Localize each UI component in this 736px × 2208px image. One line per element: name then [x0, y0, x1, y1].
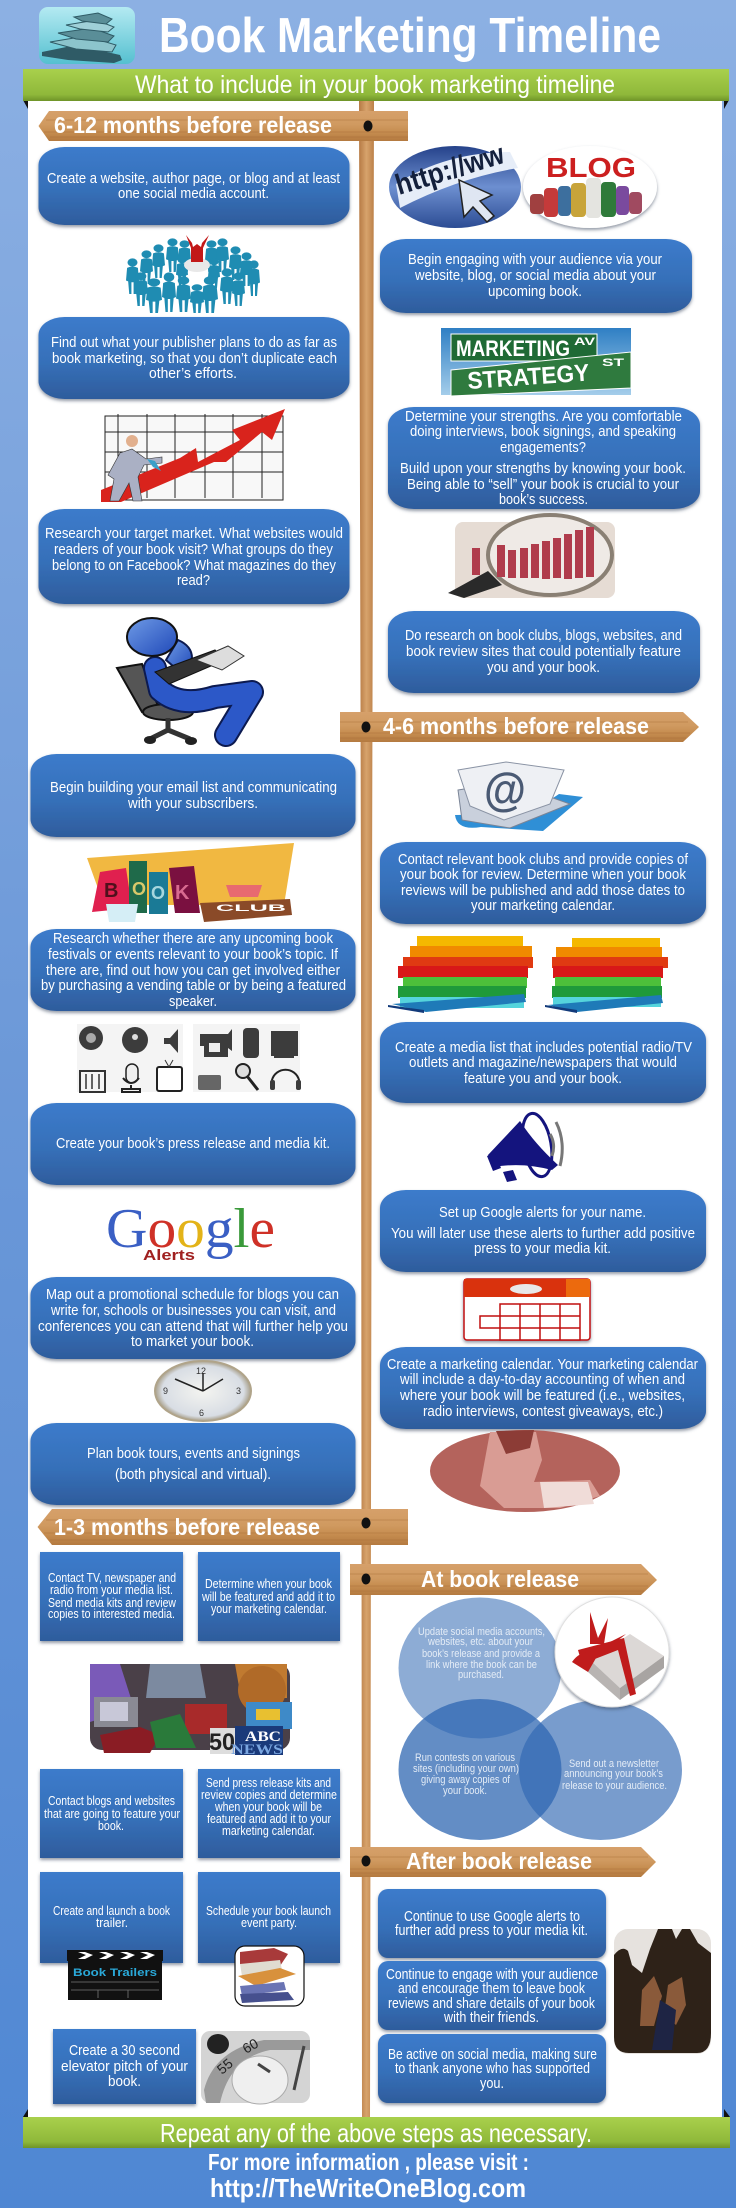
- image: email envelope with arrow: @: [484, 763, 526, 815]
- venn circle: run contests: [398, 1699, 562, 1840]
- square box: send press release kits: featured and add it to your: [207, 1811, 332, 1826]
- text box: research your target market: readers of your book visit? What groups do they: [54, 542, 334, 558]
- image: media collage: ABC: [245, 1729, 281, 1745]
- venn text: send newsletter: release to your audience.: [562, 1780, 667, 1792]
- text box: marketing calendar: radio interviews, contest giveaways, etc.): [423, 1404, 663, 1420]
- square box: elevator pitch: elevator pitch of your: [61, 2059, 188, 2075]
- text box: continue google alerts: Continue to use Google alerts to: [404, 1909, 580, 1925]
- image: crowd around a leader: [126, 235, 260, 313]
- text box: contact book clubs: reviews will be published and add those dates to: [401, 883, 685, 899]
- text box: research your target market: Research your target market. What websites would: [45, 526, 343, 542]
- text box: create a media list: [380, 1022, 706, 1103]
- square box: send press release kits: marketing calendar.: [222, 1823, 315, 1838]
- sign: 4-6 months before release: 4-6 months before release: [383, 713, 649, 739]
- image: media collage: NEWS: [231, 1742, 283, 1758]
- text box: festivals and events: speaker.: [169, 994, 217, 1010]
- text box: email list: Begin building your email list and communicating: [50, 780, 337, 796]
- text box: create a website: one social media account.: [118, 186, 269, 202]
- text box: promotional schedule: conferences you can attend that will further help you: [38, 1319, 348, 1335]
- image: red calendar: [464, 1279, 590, 1340]
- text box: google alerts: Set up Google alerts for your name.: [439, 1205, 646, 1221]
- text box: create a website: Create a website, author page, or blog and at least: [47, 171, 340, 187]
- image: stopwatch: 55: [214, 2055, 236, 2077]
- venn text: send newsletter: announcing your book’s: [564, 1768, 663, 1780]
- image: media collage: 50: [209, 1729, 235, 1756]
- image: blog with coloured people: BLOG: [546, 152, 636, 183]
- venn text: update social media: link where the book can be: [426, 1659, 537, 1671]
- text box: begin engaging: [380, 239, 692, 313]
- venn text: run contests: giving away copies of: [421, 1774, 511, 1786]
- text box: be active on social media: to thank anyone who has supported: [395, 2061, 590, 2077]
- text box: google alerts: You will later use these alerts to further add positive: [391, 1226, 695, 1242]
- text box: determine your strengths: book’s success.: [499, 492, 588, 508]
- text box: create a media list: outlets and magazine/newspapers that would: [409, 1055, 677, 1071]
- square box: launch party: [198, 1872, 340, 1963]
- image: gift-wrapped book: [555, 1597, 669, 1707]
- square box: contact tv: radio from your media list.: [50, 1582, 173, 1597]
- image: books in rounded frame: [235, 1946, 304, 2006]
- text box: be active on social media: you.: [480, 2076, 504, 2092]
- text box: research book clubs: book review sites that could potentially feature: [406, 644, 681, 660]
- text box: continue to engage: reviews and share details of your book: [388, 1996, 596, 2012]
- image: stopwatch: 60: [240, 2035, 261, 2057]
- text box: plan book tours: [30, 1423, 356, 1505]
- square box: launch party: Schedule your book launch: [206, 1903, 331, 1918]
- text box: determine your strengths: Determine your strengths. Are you comfortable: [405, 409, 682, 425]
- image: wall clock: 6: [199, 1408, 204, 1418]
- text box: publisher plans: book marketing, so that you don’t duplicate each: [52, 351, 337, 367]
- title: Book Marketing Timeline: [159, 9, 661, 63]
- venn circle: send newsletter: [519, 1700, 682, 1840]
- square box: elevator pitch: Create a 30 second: [69, 2043, 180, 2059]
- text box: continue google alerts: further add press to your media kit.: [395, 1923, 588, 1939]
- text box: email list: with your subscribers.: [127, 796, 258, 812]
- text box: festivals and events: [30, 929, 356, 1011]
- text box: research book clubs: you and your book.: [487, 660, 600, 676]
- image: wall clock: 12: [196, 1366, 206, 1376]
- image: marketing strategy street signs: MARKETING: [456, 336, 570, 361]
- text box: marketing calendar: will include a day-to-day accounting of when and: [399, 1372, 685, 1388]
- sign: 6-12 months before release: 6-12 months before release: [54, 112, 332, 138]
- image: retro book club illustration: O: [132, 879, 146, 899]
- image: http browser address globe: http://ww: [392, 138, 509, 202]
- venn text: update social media: book’s release and provide a: [422, 1648, 541, 1660]
- text box: contact book clubs: [380, 842, 706, 924]
- text box: research book clubs: [388, 611, 700, 693]
- text box: publisher plans: other’s efforts.: [149, 366, 237, 382]
- text box: research book clubs: Do research on book clubs, blogs, websites, and: [405, 628, 682, 644]
- text box: press release: Create your book’s press release and media kit.: [56, 1136, 330, 1152]
- venn text: run contests: your book.: [443, 1785, 487, 1797]
- square box: contact blogs: Contact blogs and websites: [48, 1793, 175, 1808]
- timeline post: [359, 100, 374, 2118]
- venn text: send newsletter: Send out a newsletter: [569, 1758, 659, 1770]
- image: media icon grid: [77, 1024, 301, 1092]
- image: retro book club illustration: [87, 843, 294, 922]
- image: businessman on red growth arrow: [101, 409, 285, 502]
- venn circle: update social media: [398, 1598, 562, 1738]
- image: google alerts logo: Alerts: [143, 1247, 195, 1264]
- square box: contact blogs: that are going to feature your: [44, 1806, 181, 1821]
- square box: book trailer: Create and launch a book: [53, 1903, 170, 1918]
- square box: contact blogs: [40, 1769, 183, 1858]
- square box: contact tv: copies to interested media.: [48, 1606, 175, 1621]
- venn text: run contests: [413, 1752, 519, 1797]
- text box: create a website: [38, 147, 350, 225]
- text box: determine your strengths: doing interviews, book signings, and speaking: [410, 424, 676, 440]
- image: wall clock: 3: [236, 1386, 241, 1396]
- text box: festivals and events: by purchasing a vending table or by being a featured: [41, 978, 346, 994]
- venn text: update social media: Update social media accounts,: [418, 1626, 545, 1638]
- square box: send press release kits: [198, 1769, 340, 1858]
- square box: book trailer: [40, 1872, 183, 1963]
- square box: launch party: event party.: [241, 1915, 297, 1930]
- square box: determine when featured: your marketing calendar.: [211, 1601, 327, 1616]
- image: marketing strategy street signs: AV: [574, 336, 596, 348]
- venn text: update social media: [418, 1626, 545, 1681]
- image: blog with coloured people: [523, 146, 657, 228]
- square box: determine when featured: will be featured and add it to: [201, 1589, 335, 1604]
- text box: contact book clubs: Contact relevant book clubs and provide copies of: [398, 852, 689, 868]
- venn text: run contests: sites (including your own): [413, 1763, 519, 1775]
- header logo: stack of books: [39, 7, 135, 64]
- text box: marketing calendar: Create a marketing calendar. Your marketing calendar: [387, 1357, 698, 1373]
- text box: festivals and events: there are, find out how you can get involved either: [46, 963, 340, 979]
- venn text: send newsletter: [562, 1758, 667, 1792]
- square box: contact tv: Contact TV, newspaper and: [48, 1570, 176, 1585]
- footer call to action: For more information , please visit :: [208, 2149, 529, 2175]
- square box: determine when featured: Determine when your book: [205, 1576, 332, 1591]
- sign: 1-3 months before release: [38, 1509, 408, 1545]
- sign: at book release: [350, 1564, 657, 1595]
- text box: festivals and events: Research whether there are any upcoming book: [53, 931, 334, 947]
- image: book trailers clapperboard: [67, 1950, 163, 2000]
- square box: contact tv: [40, 1552, 183, 1641]
- sign: after book release: After book release: [406, 1848, 592, 1874]
- text box: research your target market: belong to on Facebook? What magazines do they: [52, 558, 337, 574]
- sign: 6-12 months before release: [38, 111, 408, 141]
- text box: email list: [30, 754, 356, 837]
- text box: google alerts: press to your media kit.: [474, 1241, 611, 1257]
- text box: create a media list: feature you and your book.: [464, 1071, 622, 1087]
- image: http browser address globe: [389, 138, 521, 228]
- text box: continue to engage: with their friends.: [443, 2010, 539, 2026]
- image: retro book club illustration: CLUB: [216, 903, 287, 913]
- text box: continue to engage: Continue to engage with your audience: [386, 1967, 598, 1983]
- sign: at book release: At book release: [421, 1566, 579, 1592]
- text box: continue to engage: and encourage them to leave book: [398, 1981, 586, 1997]
- image: media collage: [90, 1664, 292, 1758]
- venn text: run contests: Run contests on various: [415, 1752, 515, 1764]
- text box: contact book clubs: your book for review. Determine when your book: [400, 867, 687, 883]
- text box: promotional schedule: to market your book.: [131, 1334, 254, 1350]
- image: blue figure reading in a chair: [117, 618, 252, 745]
- image: colourful book stacks: [388, 936, 668, 1013]
- image: wall clock: 9: [163, 1386, 168, 1396]
- text box: promotional schedule: write for, schools or businesses you can visit, and: [50, 1303, 336, 1319]
- square box: send press release kits: when your book will be: [214, 1799, 322, 1814]
- image: retro book club illustration: B: [104, 880, 118, 902]
- image: email envelope with arrow: [455, 762, 583, 831]
- sign: 4-6 months before release: [340, 712, 699, 742]
- square box: send press release kits: review copies and determine: [201, 1787, 337, 1802]
- image: google alerts logo: Google: [106, 1198, 275, 1260]
- top green banner: [23, 69, 729, 109]
- square box: send press release kits: Send press release kits and: [206, 1775, 331, 1790]
- text box: marketing calendar: [380, 1347, 706, 1429]
- image: graduates photo: [614, 1929, 711, 2054]
- image: retro book club illustration: O: [151, 883, 165, 903]
- sign: after book release: [350, 1847, 656, 1877]
- text box: determine your strengths: Build upon your strengths by knowing your book.: [400, 461, 686, 477]
- text box: plan book tours: Plan book tours, events and signings: [87, 1446, 300, 1462]
- image: woman signing books: [430, 1430, 620, 1512]
- text box: continue to engage: [378, 1961, 606, 2030]
- text box: begin engaging: Begin engaging with your audience via your: [408, 252, 662, 268]
- square box: elevator pitch: [53, 2029, 196, 2104]
- image: book trailers clapperboard: Book Trailers: [73, 1967, 157, 1979]
- square box: contact tv: Send media kits and review: [48, 1595, 177, 1610]
- venn text: update social media: purchased.: [458, 1669, 504, 1681]
- square box: contact blogs: book.: [98, 1818, 124, 1833]
- text box: determine your strengths: Being able to “sell” your book is crucial to your: [407, 477, 679, 493]
- text box: plan book tours: (both physical and virtual).: [115, 1467, 271, 1483]
- text box: be active on social media: [378, 2034, 606, 2103]
- text box: be active on social media: Be active on social media, making sure: [388, 2047, 597, 2063]
- image: marketing strategy street signs: ST: [602, 357, 624, 369]
- text box: festivals and events: festivals or events relevant to your book’s topic. If: [48, 947, 339, 963]
- text box: determine your strengths: engagements?: [500, 440, 586, 456]
- image: retro book club illustration: K: [175, 882, 190, 904]
- sign: 1-3 months before release: 1-3 months before release: [54, 1514, 320, 1540]
- square box: book trailer: trailer.: [96, 1915, 128, 1930]
- bottom green banner: Repeat any of the above steps as necessary.: [160, 2118, 592, 2148]
- text box: marketing calendar: where your book will be featured (i.e., websites,: [399, 1388, 685, 1404]
- text box: promotional schedule: [30, 1277, 356, 1359]
- text box: google alerts: [380, 1190, 706, 1272]
- top green banner: What to include in your book marketing timeline: [135, 71, 615, 99]
- square box: elevator pitch: book.: [108, 2074, 141, 2090]
- text box: research your target market: [38, 509, 350, 604]
- text box: publisher plans: Find out what your publisher plans to do as far as: [51, 335, 337, 351]
- image: marketing strategy street signs: STRATEGY: [467, 360, 590, 395]
- image: wall clock: [155, 1361, 251, 1421]
- text box: begin engaging: website, blog, or social media about your: [414, 268, 656, 284]
- text box: continue google alerts: [378, 1889, 606, 1958]
- text box: contact book clubs: your marketing calendar.: [471, 898, 615, 914]
- image: megaphone: [487, 1111, 562, 1182]
- text box: research your target market: read?: [177, 573, 210, 589]
- square box: determine when featured: [198, 1552, 340, 1641]
- text box: press release: [30, 1103, 356, 1185]
- bottom green banner: [23, 2109, 730, 2148]
- venn diagram of release activities: [398, 1598, 682, 1840]
- image: marketing strategy street signs: [441, 328, 631, 396]
- image: stopwatch: [201, 2031, 310, 2104]
- venn text: update social media: websites, etc. about your: [427, 1636, 533, 1648]
- text box: begin engaging: upcoming book.: [488, 284, 582, 300]
- text box: promotional schedule: Map out a promotional schedule for blogs you can: [46, 1287, 339, 1303]
- footer url: http://TheWriteOneBlog.com: [210, 2173, 526, 2203]
- text box: create a media list: Create a media list that includes potential radio/TV: [395, 1040, 692, 1056]
- text box: publisher plans: [38, 317, 350, 399]
- image: magnifier over bar chart: [448, 515, 615, 598]
- text box: determine your strengths: [388, 407, 700, 509]
